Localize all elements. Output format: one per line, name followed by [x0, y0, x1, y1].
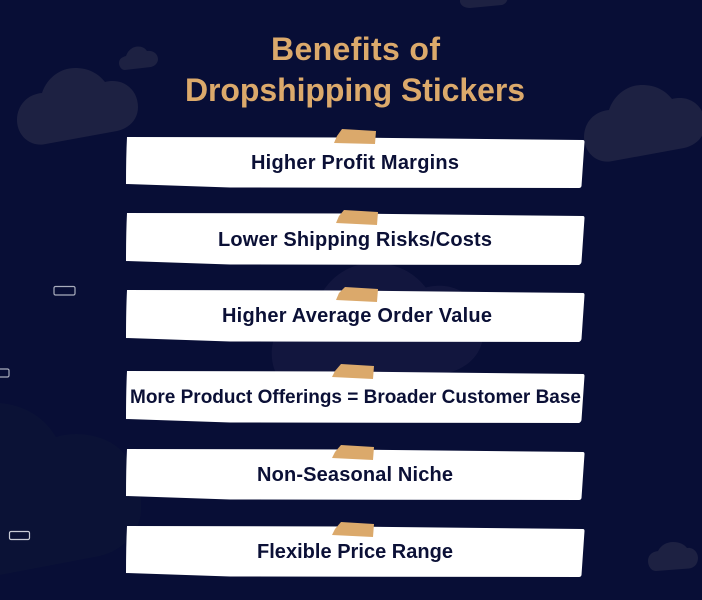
strip: Flexible Price Range: Flexible Price Range	[257, 541, 453, 563]
tape	[332, 364, 374, 379]
strip: Non-Seasonal Niche	[126, 445, 584, 500]
tape	[336, 210, 378, 225]
strip: Lower Shipping Risks/Costs: Lower Shipping Risks/Costs	[218, 229, 492, 251]
strip: Lower Shipping Risks/Costs	[126, 210, 584, 265]
tape	[334, 129, 376, 144]
title: Dropshipping Stickers	[185, 72, 525, 108]
title	[185, 31, 525, 108]
strip: Flexible Price Range	[126, 522, 584, 577]
tape	[336, 287, 378, 302]
strip: Higher Average Order Value: Higher Average Order Value	[222, 305, 492, 327]
strip: Non-Seasonal Niche: Non-Seasonal Niche	[257, 464, 453, 486]
tape	[332, 445, 374, 460]
tape	[332, 522, 374, 537]
strip: Higher Profit Margins: Higher Profit Margins	[251, 152, 459, 174]
strip: More Product Offerings = Broader Customer Base	[126, 364, 584, 423]
title: Benefits of	[271, 31, 440, 67]
strip: Higher Profit Margins	[126, 129, 584, 188]
strip: More Product Offerings = Broader Customer Base: More Product Offerings = Broader Customer Base	[130, 387, 581, 408]
small outlined rectangles	[0, 286, 75, 540]
strip: Higher Average Order Value	[126, 287, 584, 342]
